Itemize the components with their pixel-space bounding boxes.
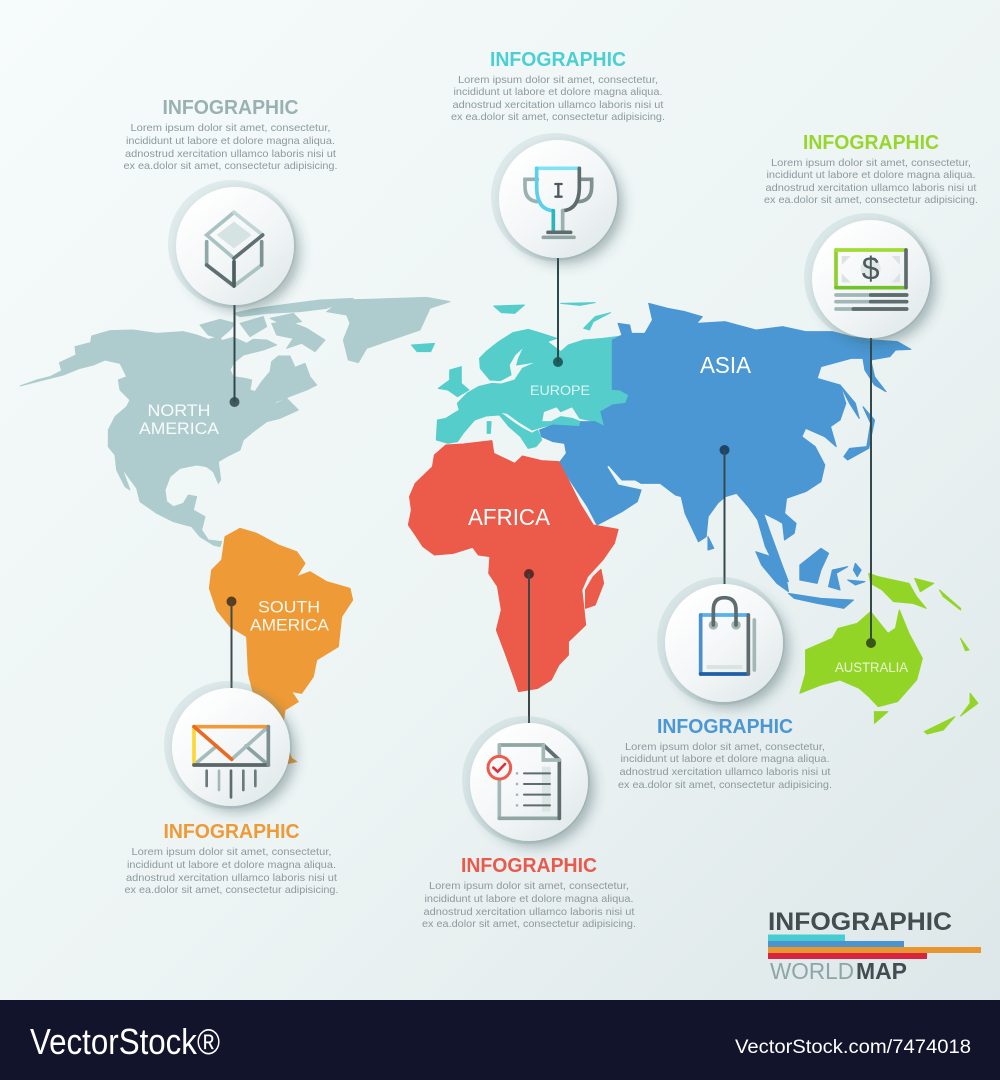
body text: Lorem ipsum dolor sit amet, consectetur, bbox=[771, 157, 971, 169]
icon: dollar bill: $ bbox=[862, 250, 880, 286]
marker: Australia bbox=[866, 335, 876, 648]
continent: Australia and Oceania bbox=[800, 573, 978, 734]
marker: Europe bbox=[553, 255, 563, 367]
body text: incididunt ut labore et dolore magna aliqua. bbox=[454, 86, 662, 98]
body text: incididunt ut labore et dolore magna aliqua. bbox=[424, 893, 634, 905]
footer brand: VectorStock® bbox=[30, 1021, 220, 1062]
callout: Europe icon disc bbox=[491, 133, 619, 261]
logo colour bars bbox=[768, 934, 981, 959]
marker: Africa bbox=[524, 569, 534, 725]
heading: INFOGRAPHIC bbox=[490, 49, 626, 71]
heading: INFOGRAPHIC bbox=[657, 716, 793, 738]
body text: incididunt ut labore et dolore magna aliqua. bbox=[766, 169, 976, 181]
body text: adnostrud xercitation ullamco laboris nisi ut bbox=[126, 872, 337, 884]
body text: ex ea.dolor sit amet, consectetur adipisicing. bbox=[422, 918, 636, 930]
label: North America second line: AMERICA bbox=[139, 419, 220, 438]
icon: envelope bbox=[194, 727, 268, 797]
marker: North America bbox=[230, 300, 240, 407]
body text: ex ea.dolor sit amet, consectetur adipisicing. bbox=[124, 884, 338, 896]
text block: Australia bbox=[764, 132, 978, 206]
body text: ex ea.dolor sit amet, consectetur adipisicing. bbox=[451, 111, 665, 123]
label: South America second line: AMERICA bbox=[250, 616, 330, 634]
body text: Lorem ipsum dolor sit amet, consectetur, bbox=[458, 74, 658, 86]
body text: adnostrud xercitation ullamco laboris nisi ut bbox=[452, 99, 664, 111]
footer url: VectorStock.com/7474018 bbox=[735, 1037, 971, 1058]
callout: South America icon disc bbox=[164, 681, 292, 809]
callout: Asia icon disc bbox=[657, 577, 785, 705]
body text: ex ea.dolor sit amet, consectetur adipisicing. bbox=[124, 160, 338, 172]
label: Europe: EUROPE bbox=[530, 382, 590, 398]
text block: Europe bbox=[451, 49, 665, 123]
body text bbox=[422, 880, 636, 930]
icon: shopping bag bbox=[701, 598, 754, 674]
logo subtitle: WORLD bbox=[770, 958, 854, 984]
continent: South America bbox=[209, 528, 353, 763]
label: North America: NORTH bbox=[148, 401, 210, 420]
body text bbox=[451, 74, 665, 123]
body text bbox=[618, 741, 832, 791]
text block: Africa bbox=[422, 855, 636, 930]
label: Asia: ASIA bbox=[700, 352, 752, 378]
world map bbox=[20, 297, 978, 763]
body text bbox=[764, 157, 978, 206]
body text: Lorem ipsum dolor sit amet, consectetur, bbox=[625, 741, 825, 753]
label: Africa: AFRICA bbox=[468, 504, 551, 530]
icon: document with check bbox=[488, 745, 559, 818]
logo: Infographic World Map bbox=[768, 908, 981, 984]
icon: trophy bbox=[525, 168, 592, 237]
marker: Asia bbox=[720, 445, 730, 586]
continent: North America bbox=[20, 297, 450, 547]
body text: adnostrud xercitation ullamco laboris nisi ut bbox=[125, 148, 336, 160]
marker: South America bbox=[226, 596, 236, 690]
body text bbox=[124, 846, 338, 896]
body text: Lorem ipsum dolor sit amet, consectetur, bbox=[429, 880, 629, 892]
text block: North America bbox=[124, 97, 338, 172]
heading: INFOGRAPHIC bbox=[803, 132, 939, 154]
body text: adnostrud xercitation ullamco laboris nisi ut bbox=[766, 182, 977, 194]
callout: Africa icon disc bbox=[462, 716, 590, 844]
text block: South America bbox=[124, 821, 338, 896]
callout: North America icon disc bbox=[168, 180, 296, 308]
body text: adnostrud xercitation ullamco laboris nisi ut bbox=[620, 766, 831, 778]
heading: INFOGRAPHIC bbox=[164, 821, 300, 843]
continent labels bbox=[139, 352, 909, 675]
heading: INFOGRAPHIC bbox=[162, 97, 298, 119]
continent: Africa bbox=[408, 441, 618, 692]
heading: INFOGRAPHIC bbox=[461, 855, 597, 877]
body text: ex ea.dolor sit amet, consectetur adipisicing. bbox=[764, 194, 978, 206]
label: South America: SOUTH bbox=[258, 598, 320, 616]
body text: Lorem ipsum dolor sit amet, consectetur, bbox=[132, 846, 332, 858]
body text: adnostrud xercitation ullamco laboris nisi ut bbox=[424, 906, 635, 918]
icon: cube bbox=[207, 212, 263, 286]
label: Australia: AUSTRALIA bbox=[835, 659, 909, 675]
continent: Europe bbox=[411, 303, 629, 448]
body text: incididunt ut labore et dolore magna aliqua. bbox=[127, 859, 336, 871]
callout: Australia icon disc bbox=[804, 213, 932, 341]
body text bbox=[124, 122, 338, 172]
text block: Asia bbox=[618, 716, 832, 791]
body text: Lorem ipsum dolor sit amet, consectetur, bbox=[130, 122, 330, 134]
logo title: INFOGRAPHIC bbox=[768, 908, 952, 936]
body text: incididunt ut labore et dolore magna aliqua. bbox=[126, 135, 335, 147]
footer bar bbox=[0, 1000, 1000, 1080]
continent: Asia bbox=[540, 303, 911, 608]
body text: ex ea.dolor sit amet, consectetur adipisicing. bbox=[618, 779, 832, 791]
logo subtitle bold: MAP bbox=[856, 958, 907, 984]
body text: incididunt ut labore et dolore magna aliqua. bbox=[620, 753, 830, 765]
